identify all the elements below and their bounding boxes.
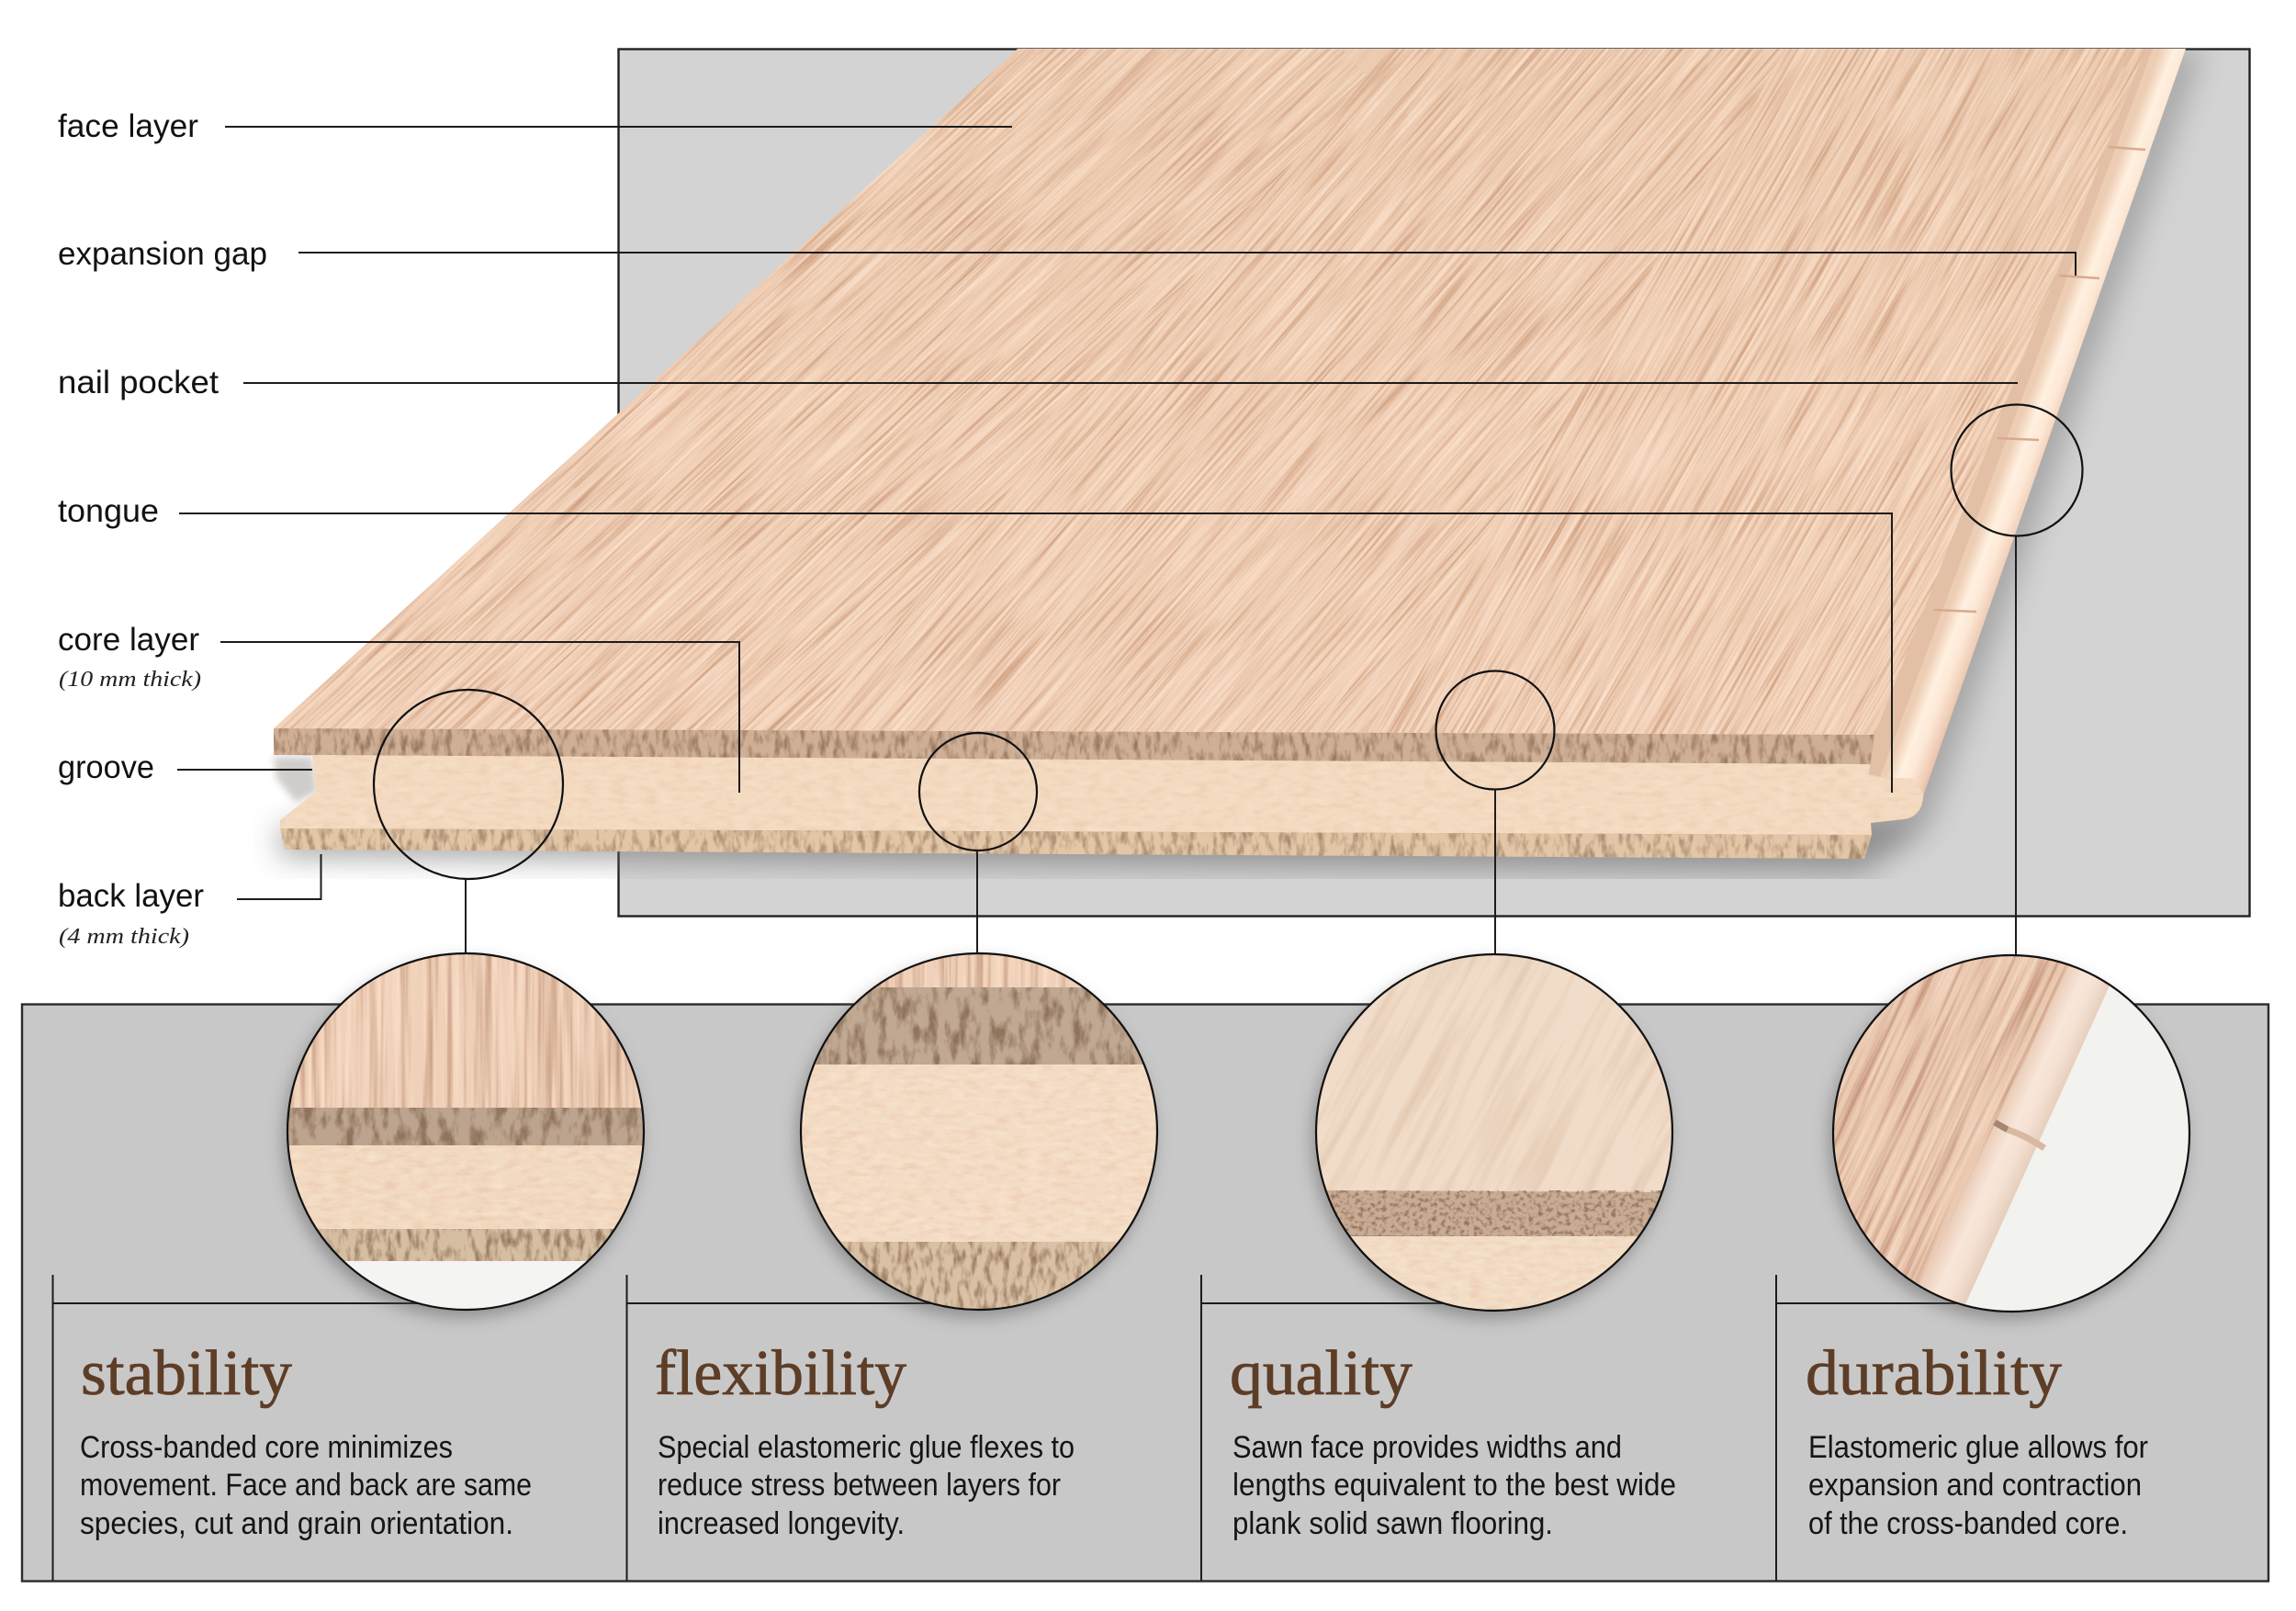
leader label: face layer: face layer [58, 108, 198, 144]
column rules [53, 1275, 1975, 1581]
leader label: groove: groove [58, 749, 154, 785]
leader label: core layer: (10 mm thick) [59, 668, 201, 692]
feature text: quality: plank solid sawn flooring. [1232, 1506, 1553, 1541]
feature text: stability: movement. Face and back are same [80, 1468, 532, 1503]
panel: bottom grey feature band [22, 1005, 2268, 1582]
leader label: core layer: core layer [58, 622, 199, 658]
feature text: flexibility [655, 1338, 1075, 1541]
back layer edge [280, 828, 1872, 859]
illustration: engineered wood plank [271, 49, 2191, 1312]
core layer edge and tongue profile [276, 751, 1929, 839]
leader label: back layer: back layer [58, 878, 204, 914]
feature text: quality [1230, 1338, 1676, 1541]
feature text: quality: quality [1230, 1338, 1412, 1409]
feature text: durability: of the cross-banded core. [1808, 1506, 2128, 1541]
feature text: stability: stability [81, 1338, 292, 1409]
callout: flexibility circle and connector [790, 733, 1176, 1317]
magnified cross-section: flexibility [802, 954, 1156, 1309]
leader label: tongue [58, 493, 1892, 793]
feature text: flexibility: increased longevity. [658, 1506, 905, 1541]
magnified cross-section: stability [288, 954, 643, 1309]
callout: quality circle and connector [1304, 670, 2190, 1326]
feature text: flexibility: Special elastomeric glue flexes to [658, 1430, 1075, 1465]
feature text: quality: Sawn face provides widths and [1232, 1430, 1622, 1465]
magnified cross-section: quality [1317, 955, 1671, 1310]
panel: top grey backdrop [619, 50, 2250, 917]
magnified detail: tongue notch [1834, 956, 2189, 1311]
callout: durability circle and connector [1820, 403, 2195, 1328]
feature text: durability: durability [1806, 1338, 2062, 1409]
tongue strip running along plank [1880, 49, 2186, 794]
feature text: flexibility: reduce stress between layers for [658, 1468, 1061, 1503]
feature text: stability [80, 1338, 532, 1541]
face layer edge [274, 728, 1874, 764]
feature text: stability: Cross-banded core minimizes [80, 1430, 453, 1465]
face layer side bevel [1869, 49, 2153, 777]
leader label: nail pocket: nail pocket [58, 365, 219, 400]
plank drop shadow [280, 49, 2202, 873]
expansion gap notches [1934, 147, 2145, 612]
leader label: core layer [58, 622, 739, 793]
leader label: expansion gap: expansion gap [58, 236, 267, 272]
leader label: back layer: (4 mm thick) [59, 925, 189, 949]
feature text: stability: species, cut and grain orientation. [80, 1506, 513, 1541]
feature text: durability: Elastomeric glue allows for [1808, 1430, 2148, 1465]
feature text: durability [1806, 1338, 2148, 1541]
feature text: flexibility: flexibility [655, 1338, 906, 1409]
plank top face surface [274, 49, 2145, 735]
callout: stability circle and connector [276, 690, 661, 1317]
leader label: tongue: tongue [58, 493, 159, 529]
groove recess shadow [274, 757, 318, 803]
feature text: quality: lengths equivalent to the best wide [1232, 1468, 1676, 1503]
leader label: expansion gap [58, 236, 2076, 276]
leader label: back layer [58, 854, 321, 949]
feature text: durability: expansion and contraction [1808, 1468, 2142, 1503]
